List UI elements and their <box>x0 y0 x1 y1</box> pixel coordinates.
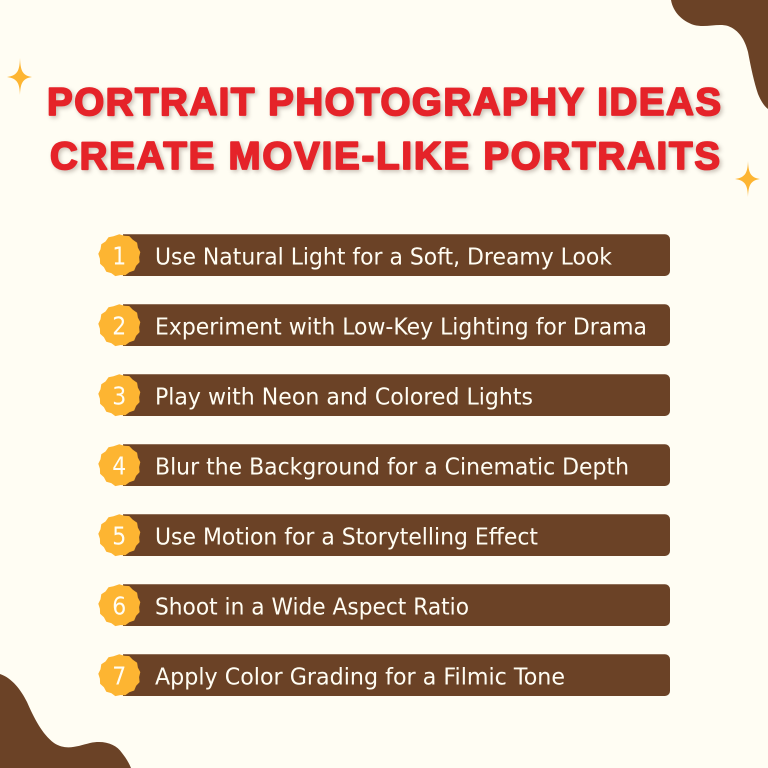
list item 3: Play with Neon and Colored Lights <box>155 382 533 410</box>
list item 2: Experiment with Low-Key Lighting for Drama <box>155 312 647 340</box>
list item 1: Use Natural Light for a Soft, Dreamy Look <box>155 242 612 270</box>
list item 6: Shoot in a Wide Aspect Ratio <box>155 592 469 620</box>
list item 4: Blur the Background for a Cinematic Depth <box>155 452 629 480</box>
icon: left sparkle <box>7 58 32 95</box>
list item 7: 7 <box>112 662 126 690</box>
list item 2 <box>98 304 670 346</box>
list item 7: Apply Color Grading for a Filmic Tone <box>155 662 565 690</box>
list item 4: 4 <box>112 452 126 480</box>
blob: bottom left corner <box>0 674 131 768</box>
title: PORTRAIT PHOTOGRAPHY IDEAS <box>47 81 721 124</box>
list item 4 <box>98 444 670 486</box>
list item 7 <box>98 654 670 696</box>
list item 5 <box>98 514 670 556</box>
title: CREATE MOVIE-LIKE PORTRAITS <box>52 137 722 180</box>
blob: top right corner <box>671 0 768 109</box>
list item 6: 6 <box>112 592 126 620</box>
list item 5: Use Motion for a Storytelling Effect <box>155 522 538 550</box>
icon: right sparkle <box>735 161 760 197</box>
list item 2: 2 <box>112 312 126 340</box>
list item 6 <box>98 584 670 626</box>
list item 1: 1 <box>112 242 126 270</box>
list item 5: 5 <box>112 522 126 550</box>
list item 3 <box>98 374 670 416</box>
list item 1 <box>98 234 670 276</box>
list item 3: 3 <box>112 382 126 410</box>
title: CREATE MOVIE-LIKE PORTRAITS <box>50 135 720 178</box>
title: PORTRAIT PHOTOGRAPHY IDEAS <box>49 83 723 126</box>
title <box>47 81 723 180</box>
